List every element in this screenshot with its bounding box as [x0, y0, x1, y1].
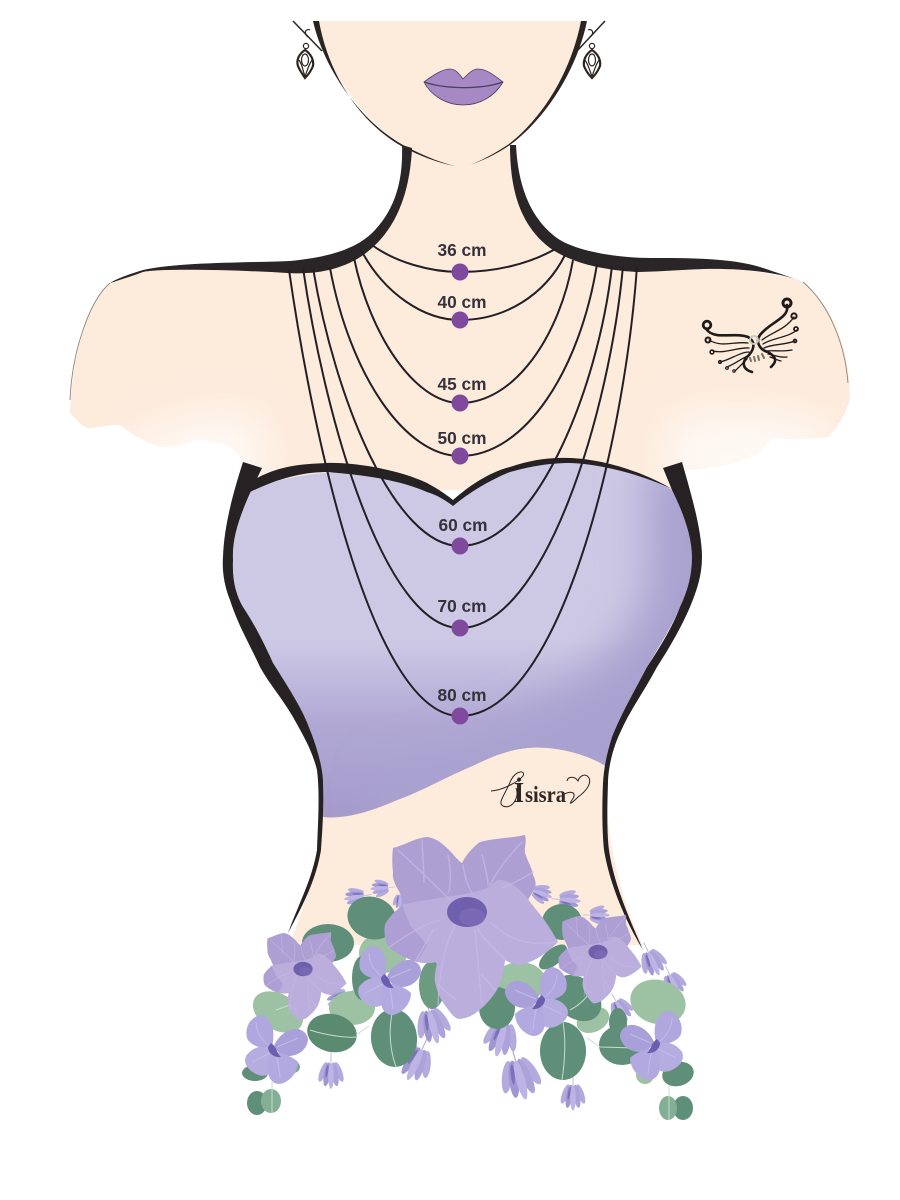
- marker and label: 50 cm: 50 cm: [437, 428, 487, 448]
- dress: lavender bustier: [233, 463, 692, 818]
- outline: right torso: [602, 462, 702, 950]
- dress: neckline: [250, 458, 672, 506]
- marker and label: 45 cm: [437, 374, 487, 412]
- shading: faded lower arms: [125, 415, 835, 500]
- flower: small blue lower right: [620, 1011, 683, 1080]
- marker and label: 45 cm: 45 cm: [437, 374, 487, 394]
- marker and label: 60 cm: 60 cm: [438, 515, 488, 535]
- skin: lower torso: [290, 730, 643, 945]
- marker and label: 80 cm: 80 cm: [437, 685, 487, 705]
- lips: [424, 69, 503, 105]
- flower: large centre: [385, 835, 558, 1019]
- floral arrangement: [242, 835, 697, 1120]
- marker and label: 60 cm: [438, 515, 488, 554]
- face: [316, 21, 584, 166]
- marker and label: 70 cm: 70 cm: [437, 596, 487, 616]
- outline: right neck and shoulder: [510, 145, 803, 282]
- outline: right jaw: [470, 21, 587, 165]
- icon: left earring: [293, 21, 322, 78]
- marker and label: 36 cm: [437, 240, 487, 280]
- necklace: 45 cm: [354, 258, 573, 403]
- outline: left torso: [223, 462, 323, 933]
- outline: left neck and shoulder: [110, 145, 412, 283]
- necklace: 40 cm: [361, 250, 565, 320]
- flower: small blue left: [358, 946, 421, 1015]
- icon: right earring: [577, 21, 605, 78]
- outline: left jaw: [313, 21, 455, 166]
- marker and label: 80 cm: [437, 685, 487, 724]
- necklace: 50 cm: [330, 264, 597, 456]
- marker and label: 36 cm: 36 cm: [437, 240, 487, 260]
- signature: Isisra: İsisra: [514, 776, 566, 809]
- flower: right: [558, 915, 642, 1003]
- necklace: 36 cm: [372, 245, 557, 272]
- marker and label: 40 cm: 40 cm: [437, 292, 487, 312]
- icon: butterfly wing tattoo: [703, 299, 798, 372]
- eucalyptus leaves: [242, 890, 697, 1120]
- necklace: 80 cm: [289, 266, 637, 716]
- marker and label: 40 cm: [437, 292, 487, 328]
- lavender sprigs: [316, 877, 691, 1110]
- skin: upper body, arms and shoulders: [70, 148, 850, 490]
- marker and label: 70 cm: [437, 596, 487, 636]
- necklace: 60 cm: [313, 266, 612, 546]
- flower: small blue lower left: [245, 1015, 308, 1084]
- outline: arm edges: [70, 282, 848, 400]
- flower: small blue middle: [505, 967, 568, 1036]
- necklace: 70 cm: [303, 266, 623, 628]
- necklace length infographic: [70, 20, 850, 1120]
- flower: left: [263, 932, 347, 1020]
- marker and label: 50 cm: [437, 428, 487, 464]
- signature: Isisra: [491, 772, 590, 809]
